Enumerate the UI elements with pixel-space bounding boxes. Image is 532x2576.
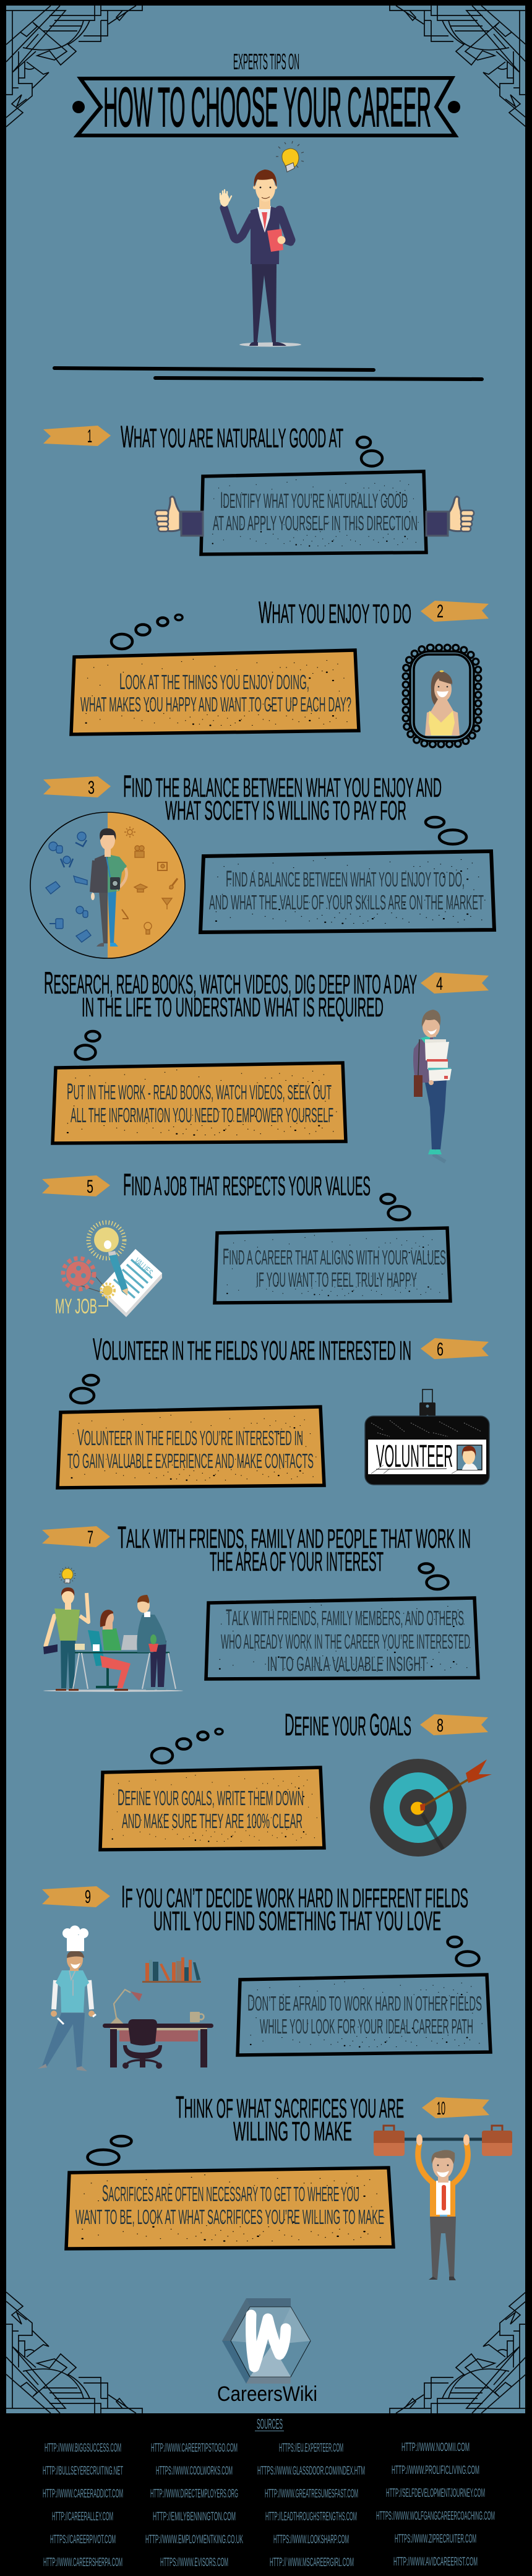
corner ornament bottom left bbox=[6, 2292, 142, 2413]
icons: money bbox=[46, 832, 91, 942]
logo: CareersWiki bbox=[217, 2298, 317, 2406]
text box 1 bbox=[201, 471, 426, 554]
section 8: AND MAKE SURE THEY ARE 100% CLEAR bbox=[122, 1810, 302, 1832]
illustration: values pencil and gears bbox=[55, 1222, 162, 1318]
thought bubbles 8 bbox=[152, 1728, 223, 1763]
heading 4 bbox=[44, 966, 417, 1023]
text box 9 bbox=[238, 1975, 491, 2055]
ribbon 7 bbox=[42, 1526, 110, 1548]
text box 2: LOOK AT THE THINGS YOU ENJOY DOING, bbox=[119, 669, 309, 694]
ribbon 10 bbox=[422, 2097, 489, 2119]
infographic canvas: HTTP://LEADTHROUGHSTRENGTHS.COM bbox=[265, 2510, 357, 2523]
infographic canvas: HTTP://WWW.EMPLOYMENTKING.CO.UK bbox=[145, 2533, 243, 2546]
icon: thumbs up bbox=[155, 497, 474, 536]
illustration: businessman bbox=[220, 170, 301, 346]
icon: small bulb bbox=[59, 1568, 75, 1583]
infographic canvas: HTTP:// WWW.MSCAREERGIRL.COM bbox=[270, 2556, 354, 2569]
section 8 bbox=[100, 1707, 492, 1857]
logo wordmark: CareersWiki bbox=[217, 2382, 317, 2406]
heading 3 bbox=[123, 769, 442, 826]
section 4 bbox=[44, 966, 489, 1162]
ribbon 2: 2 bbox=[437, 601, 444, 622]
infographic canvas: HTTP://CAREERALLEY.COM bbox=[52, 2510, 113, 2523]
ribbon 9 bbox=[42, 1886, 110, 1907]
corner ornament top left bbox=[6, 6, 142, 127]
ribbon 6: 6 bbox=[437, 1339, 444, 1360]
briefcase right bbox=[482, 2126, 512, 2156]
thought bubbles 10 bbox=[88, 2136, 131, 2165]
infographic canvas: HTTPS://WWW.EVISORS.COM bbox=[160, 2556, 228, 2569]
infographic canvas: HTTPS://WWW.COOLWORKS.COM bbox=[156, 2465, 233, 2478]
sources heading bbox=[255, 2416, 284, 2432]
heading 10 bbox=[176, 2090, 404, 2147]
text box 8 bbox=[100, 1767, 324, 1850]
title banner bbox=[72, 77, 460, 139]
illustration: volunteer badge bbox=[365, 1389, 489, 1485]
desk lamp bbox=[111, 1990, 142, 2024]
thought bubbles 5 bbox=[381, 1194, 410, 1220]
text box 6 bbox=[58, 1407, 324, 1488]
infographic canvas: HTTP://WWW.BIGGSUCCESS.COM bbox=[45, 2442, 121, 2455]
section 8: DEFINE YOUR GOALS, WRITE THEM DOWN bbox=[118, 1785, 304, 1810]
ribbon 5: 5 bbox=[87, 1177, 93, 1197]
illustration: values pencil and gears: MY JOB bbox=[55, 1295, 97, 1318]
ribbon 5 bbox=[42, 1175, 110, 1197]
thought bubbles 1 bbox=[357, 437, 382, 466]
infographic canvas: HTTPS://WWW.LOOKSHARP.COM bbox=[273, 2533, 349, 2546]
sources list column 3: HTTPS://EU.EXPERTEER.COM bbox=[279, 2442, 343, 2455]
heading 7 bbox=[118, 1520, 471, 1577]
section 10 bbox=[66, 2090, 512, 2280]
illustration: student with books bbox=[413, 1010, 452, 1162]
section 5 bbox=[42, 1167, 450, 1318]
illustration: chef doctor mechanic bbox=[36, 1925, 213, 2071]
sources list column 2 bbox=[145, 2442, 243, 2569]
icon: lightbulb bbox=[276, 141, 304, 172]
infographic canvas: SOURCES bbox=[257, 2416, 283, 2432]
text box 10 bbox=[66, 2168, 393, 2249]
infographic canvas: HTTPS://CAREERPIVOT.COM bbox=[50, 2533, 116, 2546]
thought bubbles 6 bbox=[71, 1375, 99, 1403]
illustration: three colleagues at desk bbox=[43, 1568, 183, 1692]
ribbon 9: 9 bbox=[85, 1887, 91, 1907]
thought bubbles 9 bbox=[448, 1937, 479, 1966]
heading 8: DEFINE YOUR GOALS bbox=[285, 1707, 411, 1742]
sources list column 1 bbox=[43, 2442, 123, 2569]
infographic canvas: HTTPS://WWW.GLASSDOOR.COM/INDEX.HTM bbox=[257, 2465, 365, 2478]
ribbon 4 bbox=[421, 972, 489, 994]
sources list column 3 bbox=[257, 2442, 365, 2569]
ribbon 10: 10 bbox=[437, 2098, 445, 2119]
illustration: man lifting briefcases bbox=[374, 2126, 512, 2280]
man half suit half casual bbox=[91, 828, 127, 947]
infographic canvas: HTTP://WWW.GREATRESUMESFAST.COM bbox=[265, 2488, 358, 2501]
infographic canvas: EXPERTS TIPS ON bbox=[233, 49, 299, 74]
books on shelf bbox=[142, 1957, 201, 1983]
desk and chair bbox=[103, 2019, 213, 2069]
thought bubbles 2 bbox=[111, 615, 182, 649]
text box 3 bbox=[200, 851, 494, 932]
ribbon 3: 3 bbox=[88, 778, 95, 798]
sources list column 4 bbox=[376, 2441, 495, 2569]
briefcase left bbox=[374, 2126, 405, 2156]
infographic canvas: HTTP://WWW.CAREERADDICT.COM bbox=[43, 2488, 123, 2501]
ribbon 1: 1 bbox=[87, 426, 92, 447]
ribbon 1 bbox=[43, 426, 111, 447]
section 7 bbox=[42, 1520, 478, 1692]
section 1 bbox=[43, 419, 474, 554]
text box 2 bbox=[71, 650, 359, 734]
corner ornament top right bbox=[390, 6, 526, 127]
infographic canvas: HTTP://EMILYBENNINGTON.COM bbox=[153, 2510, 236, 2523]
ribbon 8: 8 bbox=[437, 1715, 444, 1736]
infographic canvas: HTTP://WWW.CAREERTIPSTOGO.COM bbox=[151, 2442, 238, 2455]
infographic canvas: HTTP://WWW.DIRECTEMPLOYERS.ORG bbox=[150, 2488, 238, 2501]
thought bubbles 4 bbox=[75, 1031, 100, 1059]
illustration: values pencil and gears: VALUES bbox=[132, 1256, 155, 1278]
icons: hobbies bbox=[122, 826, 178, 934]
ribbon 8 bbox=[420, 1714, 488, 1736]
infographic canvas: HTTP://WWW.CAREERSHERPA.COM bbox=[43, 2556, 122, 2569]
illustration: framed woman bbox=[406, 648, 478, 744]
corner ornament bottom right bbox=[390, 2292, 526, 2413]
text box 4 bbox=[53, 1063, 346, 1143]
thought bubbles 3 bbox=[426, 817, 466, 844]
text box 5 bbox=[215, 1228, 450, 1303]
ribbon 6 bbox=[421, 1338, 489, 1360]
ribbon 2 bbox=[421, 601, 489, 622]
section 3 bbox=[30, 769, 494, 958]
ribbon 7: 7 bbox=[87, 1527, 93, 1548]
decorative brush lines bbox=[54, 368, 482, 379]
section 6 bbox=[58, 1332, 489, 1488]
section 2 bbox=[71, 595, 489, 744]
illustration: target with arrow bbox=[370, 1759, 492, 1857]
heading 9 bbox=[121, 1879, 468, 1936]
illustration: split circle with man bbox=[30, 812, 185, 958]
text box 7 bbox=[206, 1598, 478, 1679]
thought bubbles 7 bbox=[419, 1564, 448, 1589]
ribbon 3 bbox=[43, 776, 111, 798]
heading 10: WILLING TO MAKE bbox=[233, 2116, 352, 2147]
section 9 bbox=[36, 1879, 491, 2071]
infographic canvas: HTTP://BULLSEYERECRUITING.NET bbox=[43, 2465, 123, 2478]
ribbon 4: 4 bbox=[436, 974, 443, 994]
mug bbox=[190, 2012, 204, 2022]
